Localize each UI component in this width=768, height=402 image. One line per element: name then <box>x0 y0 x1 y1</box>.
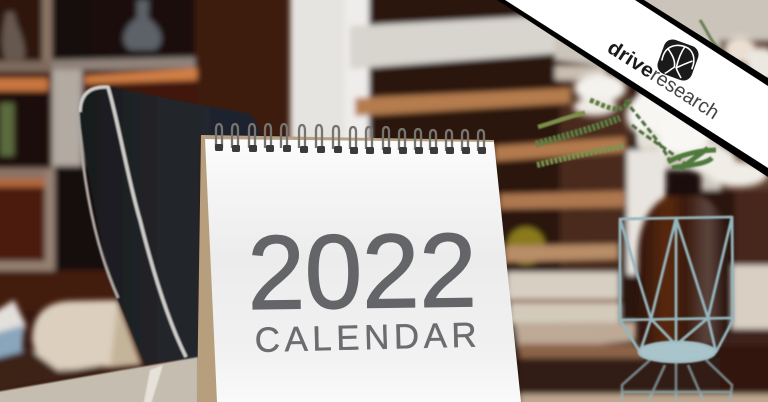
calendar back cover <box>197 135 222 402</box>
wire vase holder <box>620 217 733 402</box>
heading: 2022: 2022 <box>247 212 477 332</box>
blurred right room: white column and ropes <box>290 0 768 402</box>
blurred cushion and pillow <box>0 300 142 394</box>
wordmark: drive research: driveresearch <box>603 37 723 124</box>
flowers and fern leaves <box>536 20 768 187</box>
table top <box>0 357 198 402</box>
calendar page <box>205 139 521 402</box>
subheading: CALENDAR: CALENDAR <box>254 316 477 360</box>
calendar top edge <box>201 135 494 143</box>
bottle <box>636 170 726 345</box>
vase reflection <box>622 360 732 402</box>
blurred left shelving background <box>0 0 300 402</box>
chair <box>78 86 260 364</box>
spiral binding rings <box>215 124 486 154</box>
icon: drive research logo mark <box>655 37 701 83</box>
diagonal logo banner <box>497 0 768 177</box>
